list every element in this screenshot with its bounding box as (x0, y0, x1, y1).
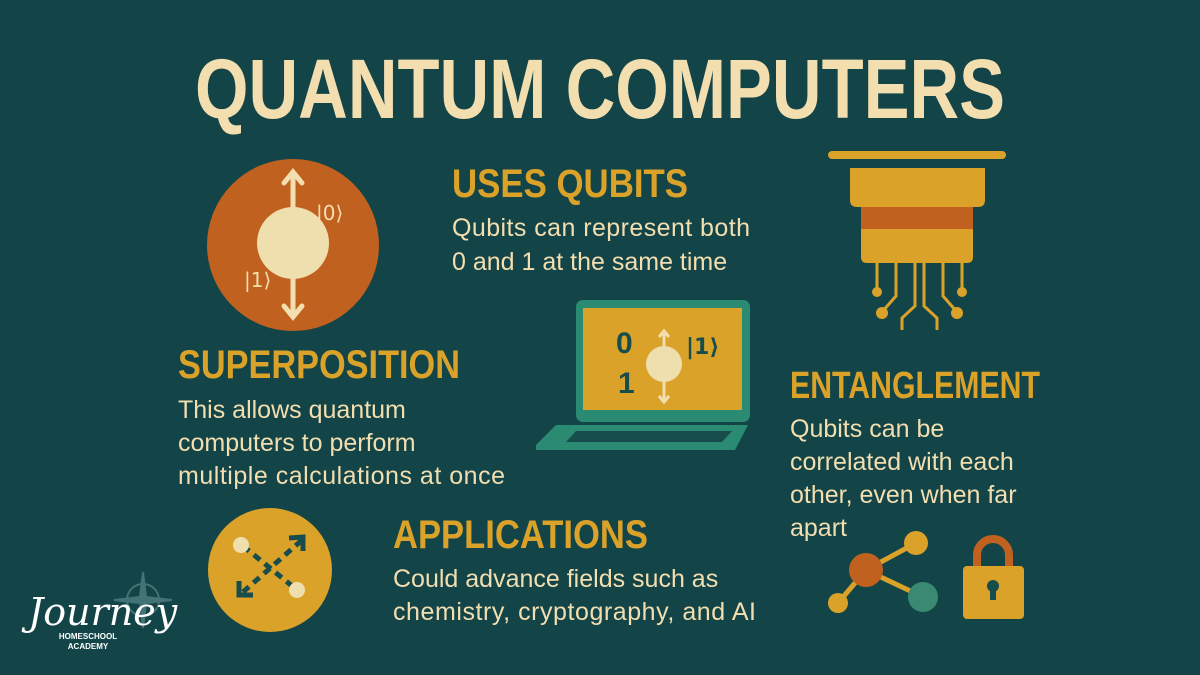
text: superposition: This allows quantum (178, 396, 406, 424)
logo: HOMESCHOOL (59, 632, 117, 641)
logo: Journey (21, 590, 178, 634)
text: entanglement: other, even when far (790, 481, 1017, 509)
icon: entangled nodes (828, 531, 938, 613)
text: uses qubits: Qubits can represent both (452, 214, 750, 242)
heading: entanglement: ENTANGLEMENT (790, 365, 1040, 407)
heading: applications: APPLICATIONS (393, 513, 648, 557)
icon: superposition qubit (207, 159, 379, 331)
text: superposition: computers to perform (178, 429, 416, 457)
icon: laptop: 0 (616, 327, 633, 360)
icon: superposition qubit: |1⟩ (244, 268, 271, 292)
icon: laptop: |1⟩ (686, 335, 719, 360)
icon: padlock (963, 539, 1024, 619)
text: applications: Could advance fields such as (393, 565, 718, 593)
icon: applications (208, 508, 332, 632)
text: entanglement: Qubits can be (790, 415, 944, 443)
icon: superposition qubit: |0⟩ (316, 201, 343, 225)
icon: laptop: 1 (618, 367, 635, 400)
logo (21, 572, 178, 651)
icon: quantum chip (828, 151, 1006, 330)
heading: uses qubits: USES QUBITS (452, 162, 688, 206)
title: QUANTUM COMPUTERS (195, 42, 1005, 136)
text: entanglement: apart (790, 514, 847, 542)
text: applications: chemistry, cryptography, and AI (393, 598, 756, 626)
logo: ACADEMY (68, 642, 109, 651)
text: superposition: multiple calculations at once (178, 462, 505, 490)
heading: superposition: SUPERPOSITION (178, 343, 460, 387)
icon: laptop (536, 300, 750, 450)
text: entanglement: correlated with each (790, 448, 1014, 476)
text: uses qubits: 0 and 1 at the same time (452, 248, 727, 276)
